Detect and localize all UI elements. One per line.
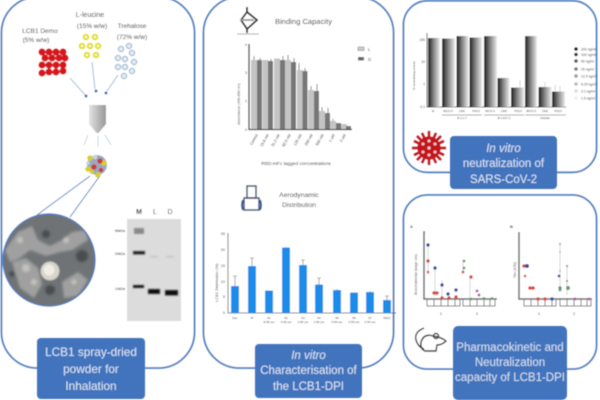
legend: binding capacity: L	[368, 47, 371, 52]
gel lane D: D	[167, 209, 173, 216]
gel bands	[133, 228, 178, 296]
chart: neutralization bars: 1	[423, 82, 425, 86]
legend: neutralization: 3.1 ng/ml	[581, 90, 595, 94]
chart: neutralization bars: WCO.5	[443, 109, 453, 113]
chart: scatter B: 2	[573, 311, 576, 316]
x tick labels: S6	[352, 316, 356, 320]
chart: aerodynamic distribution bars: 20	[221, 248, 225, 252]
legend: neutralization: 12.5 ng/ml	[581, 74, 597, 78]
icon: spray nozzle	[89, 105, 106, 133]
chart: binding capacity bars: 3	[245, 71, 247, 75]
x tick labels: Dev	[232, 316, 238, 320]
label: LCB1 percent: (5% w/w)	[23, 37, 49, 44]
x tick labels: 500 nM	[315, 134, 325, 146]
heading: Aerodynamic Distribution: Aerodynamic	[279, 192, 319, 199]
chart: neutralization bars: PD13	[472, 109, 480, 113]
y axis label: Bronchoalveolar lavage conc.	[414, 253, 418, 295]
panel: pharmacokinetic and neutralization	[404, 195, 596, 369]
chart: aerodynamic distribution bars	[214, 232, 396, 324]
callout: in vitro neutralization: SARS-CoV-2	[470, 174, 537, 186]
callout: in vitro neutralization: In vitro	[486, 143, 521, 155]
group labels: 1	[538, 311, 541, 316]
x tick labels: 125 nM	[293, 134, 303, 146]
chart: neutralization bars: WCO.5	[485, 109, 495, 113]
callout: in vitro characterisation: the LCB1-DPI	[273, 381, 344, 393]
x tick labels	[249, 133, 347, 147]
x tick labels: 0.34 um	[365, 320, 376, 324]
icon: red LCB1 particles	[38, 48, 69, 77]
x tick labels: Control	[249, 133, 259, 146]
gel marker labels	[115, 229, 125, 291]
x tick labels: 0.55 um	[349, 320, 360, 324]
x tick labels: 15.6 nM	[260, 134, 270, 147]
icon: binding capacity	[237, 7, 259, 34]
x tick labels: 62.5 nM	[282, 134, 292, 147]
heading: Binding Capacity: Binding Capacity	[275, 17, 332, 26]
chart: neutralization bars: PD13	[514, 109, 522, 113]
chart: neutralization bars: 10	[421, 60, 425, 64]
x axis title: RBD-mFc tagged concentrations	[261, 161, 331, 167]
tick boxes	[427, 299, 495, 306]
legend: binding capacity	[358, 47, 372, 62]
tick boxes	[524, 299, 591, 306]
gel marker labels: 20kDa	[115, 252, 125, 256]
panel: spray-dried powder	[2, 0, 194, 368]
chart: aerodynamic distribution bars: 25	[221, 232, 225, 236]
callout: in vitro characterisation	[255, 344, 362, 398]
icon: inhaler	[242, 186, 261, 210]
legend: neutralization: 200 ng/ml	[581, 48, 596, 52]
legend: neutralization: 6.25 ng/ml	[581, 82, 597, 86]
y axis label: Absorbance (450-650 nm)	[237, 83, 241, 125]
icon: mouse	[416, 328, 446, 351]
chart: neutralization bars: CM1	[459, 109, 465, 113]
gel marker labels: 14kDa	[115, 287, 125, 291]
chart: gel electrophoresis	[115, 209, 181, 321]
chart: aerodynamic distribution bars: 0	[223, 311, 225, 315]
chart: neutralization bars: WCO.5	[526, 109, 536, 113]
callout: spray-dried powder: Inhalation	[65, 379, 117, 393]
x tick labels: S1	[267, 316, 271, 320]
x tick labels: 2 uM	[339, 134, 347, 143]
callout: spray-dried powder	[37, 338, 145, 399]
chart: neutralization bars: B.1.1.7	[457, 116, 467, 120]
callout: in vitro characterisation: Characterisation of	[260, 365, 358, 377]
x tick labels: 1 uM	[328, 134, 336, 143]
x tick labels: 2.82 um	[298, 320, 309, 324]
icon: composite particle	[85, 155, 107, 178]
callout: pharmacokinetic and neutralization: Neutralization	[475, 357, 545, 369]
x tick labels: MOC	[384, 316, 391, 320]
chart: neutralization bars: 100	[419, 38, 425, 42]
label: LCB1 Demo: LCB1 Demo	[22, 28, 58, 35]
callout: pharmacokinetic and neutralization: capacity of LCB1-DPI	[455, 372, 565, 384]
chart: neutralization bars: Vehicle	[540, 116, 550, 120]
callout: spray-dried powder: powder for	[63, 362, 119, 376]
x tick labels: S2	[284, 316, 288, 320]
y axis label: % neutralising activity	[412, 61, 416, 90]
x tick labels: S4	[317, 316, 321, 320]
callout: in vitro neutralization	[450, 136, 557, 189]
panel: in vitro neutralization	[404, 1, 597, 172]
x tick labels: 0.94 um	[332, 320, 343, 324]
legend: neutralization: 100 ng/ml	[581, 53, 596, 57]
callout: in vitro characterisation: In vitro	[291, 350, 326, 362]
chart: neutralization bars	[412, 33, 566, 120]
heading: Aerodynamic Distribution	[279, 192, 319, 209]
x tick labels: S3	[301, 316, 305, 320]
chart: neutralization bars: CM1	[542, 109, 548, 113]
spray lines	[84, 135, 111, 147]
chart: neutralization bars: M	[432, 109, 435, 113]
x tick labels: 250 nM	[304, 134, 314, 146]
callout: pharmacokinetic and neutralization: Pharmacokinetic and	[456, 342, 564, 354]
heading: Aerodynamic Distribution: Distribution	[282, 202, 316, 209]
legend: binding capacity: D	[368, 57, 372, 62]
group labels: 1	[440, 311, 443, 316]
chart: aerodynamic distribution bars: 5	[223, 295, 225, 299]
chart: neutralization bars: PD13	[554, 109, 562, 113]
icon: SARS-CoV-2 virus	[412, 131, 446, 165]
x tick labels: 8.06 um	[264, 320, 275, 324]
label: L-leucine percent: (15% w/w)	[77, 23, 107, 30]
x axis groupings	[442, 114, 566, 116]
label: L-leucine: L-leucine	[76, 12, 104, 19]
x tick labels	[232, 316, 391, 324]
x tick labels: S5	[335, 316, 339, 320]
legend: neutralization: 1.5 ng/ml	[581, 96, 595, 100]
image: SEM micrograph	[3, 214, 95, 306]
chart: scatter A: 2	[476, 311, 479, 316]
panel: in vitro characterisation	[204, 0, 396, 368]
chart: aerodynamic distribution bars: 10	[221, 280, 225, 284]
x tick labels: 4.46 um	[281, 320, 292, 324]
label: Trehalose: Trehalose	[118, 23, 147, 30]
chart: scatter A	[410, 224, 497, 316]
icon: blue trehalose particles	[115, 43, 137, 79]
chart: scatter B: B	[510, 224, 513, 229]
x tick labels: IP	[251, 316, 253, 320]
chart: binding capacity bars: 1	[245, 99, 247, 103]
y axis label: LCB1 Distribution (%)	[214, 263, 219, 302]
chart: neutralization bars: B.1.617.2	[498, 116, 511, 120]
gel lane L: L	[153, 209, 157, 216]
callout: pharmacokinetic and neutralization	[453, 326, 567, 400]
chart: binding capacity bars: 0	[245, 128, 247, 132]
gel marker labels: 66kDa	[115, 229, 125, 233]
chart: binding capacity bars: 4	[245, 43, 247, 47]
legend: neutralization: 50 ng/ml	[581, 60, 594, 64]
legend: neutralization	[574, 47, 597, 100]
y axis label: Titer (IC50)	[513, 262, 517, 278]
x tick labels: 1.66 um	[314, 320, 325, 324]
chart: scatter B	[510, 224, 592, 316]
callout: spray-dried powder: LCB1 spray-dried	[45, 345, 137, 359]
chart: neutralization bars: 0.1	[420, 105, 425, 109]
label: Trehalose percent: (72% w/w)	[117, 34, 147, 41]
chart: neutralization bars: CM1	[501, 109, 507, 113]
x tick labels: 31.2 nM	[271, 134, 281, 147]
legend: neutralization: 25 ng/ml	[581, 68, 594, 72]
x tick labels: S7	[368, 316, 372, 320]
arrows into nozzle	[70, 62, 118, 98]
callout: in vitro neutralization: neutralization of	[463, 158, 545, 170]
chart: scatter A: A	[410, 224, 413, 229]
gel lane labels: M	[136, 209, 142, 216]
icon: yellow L-leucine particles	[80, 35, 100, 57]
chart: aerodynamic distribution bars: 15	[221, 264, 225, 268]
zoom lines to micrograph	[37, 176, 99, 217]
chart: binding capacity bars	[237, 43, 352, 167]
